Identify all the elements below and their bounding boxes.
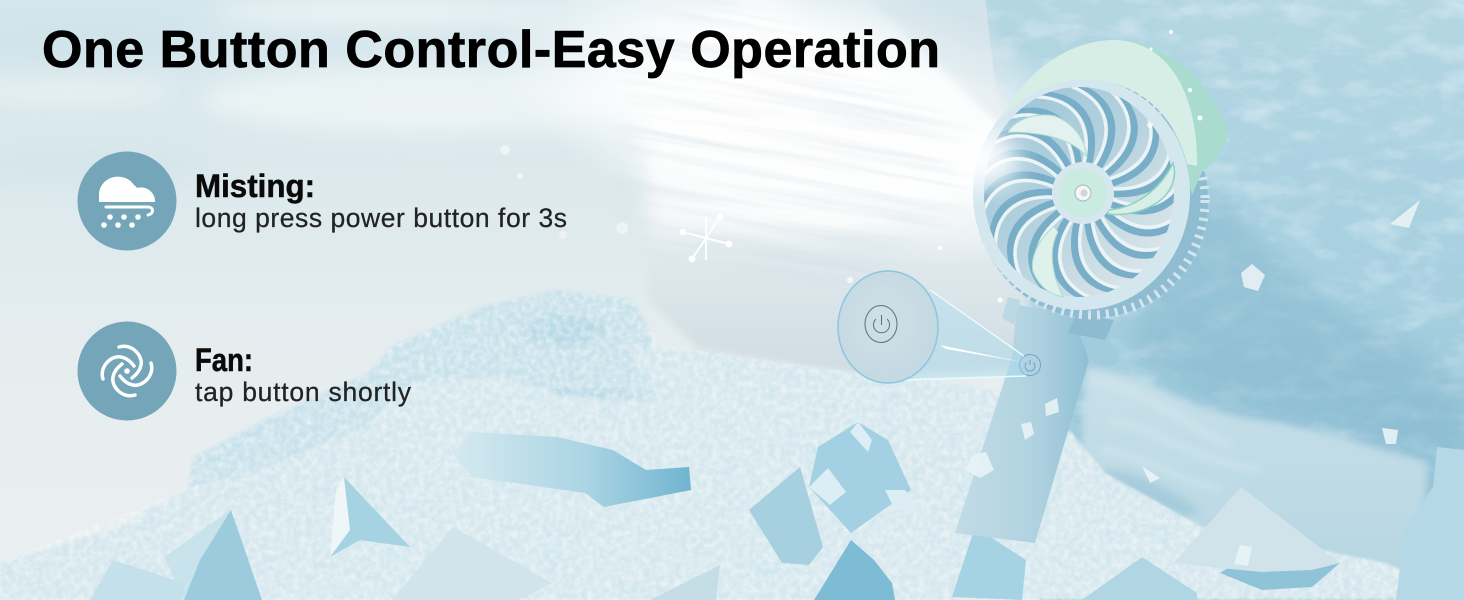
power button on handle bbox=[1020, 354, 1040, 376]
heading: fan: Fan: bbox=[195, 342, 253, 378]
snow sparkles bbox=[500, 30, 1202, 302]
ice flakes bbox=[965, 200, 1420, 566]
fan opening bbox=[984, 87, 1174, 297]
lens bbox=[838, 271, 938, 383]
mint rear shell side bbox=[1135, 42, 1228, 195]
ice crystals bbox=[90, 422, 1464, 600]
background: lower ice band bbox=[1080, 367, 1428, 580]
front ring bbox=[973, 78, 1190, 310]
background: blue ice rock wall bbox=[985, 0, 1464, 600]
title: One Button Control-Easy Operation bbox=[42, 21, 940, 79]
mint shell front bbox=[1003, 40, 1197, 166]
mist stream from the fan bbox=[522, 0, 1040, 246]
icon: misting cloud bbox=[78, 152, 176, 250]
rear cage bbox=[976, 82, 1208, 318]
text: misting instruction: long press power button for 3s bbox=[195, 203, 567, 233]
heading: misting: Misting: bbox=[195, 168, 315, 204]
icon: fan swirl bbox=[78, 322, 176, 420]
fan blades bbox=[984, 87, 1174, 297]
fan hinge bbox=[1068, 313, 1114, 340]
snowflake bbox=[680, 214, 732, 262]
background: clouds at top-left bbox=[0, 0, 660, 183]
callout: magnified power button bbox=[838, 271, 1026, 383]
hinge joint bbox=[1002, 297, 1020, 325]
text: fan instruction: tap button shortly bbox=[195, 377, 412, 407]
fan hub bbox=[1052, 162, 1114, 224]
product: handheld misting fan bbox=[951, 40, 1228, 543]
mist glare at blades bbox=[951, 132, 1019, 188]
callout beams bbox=[900, 290, 1026, 380]
fan handle bbox=[955, 305, 1089, 543]
background: pale frosted ice block bbox=[648, 69, 1040, 375]
large mint-white blades bbox=[1008, 115, 1174, 297]
mist nozzle bbox=[1075, 185, 1091, 201]
background: smooth snow mound bbox=[189, 290, 672, 487]
background: snow ground bbox=[0, 280, 1464, 600]
lens power icon bbox=[865, 306, 897, 342]
